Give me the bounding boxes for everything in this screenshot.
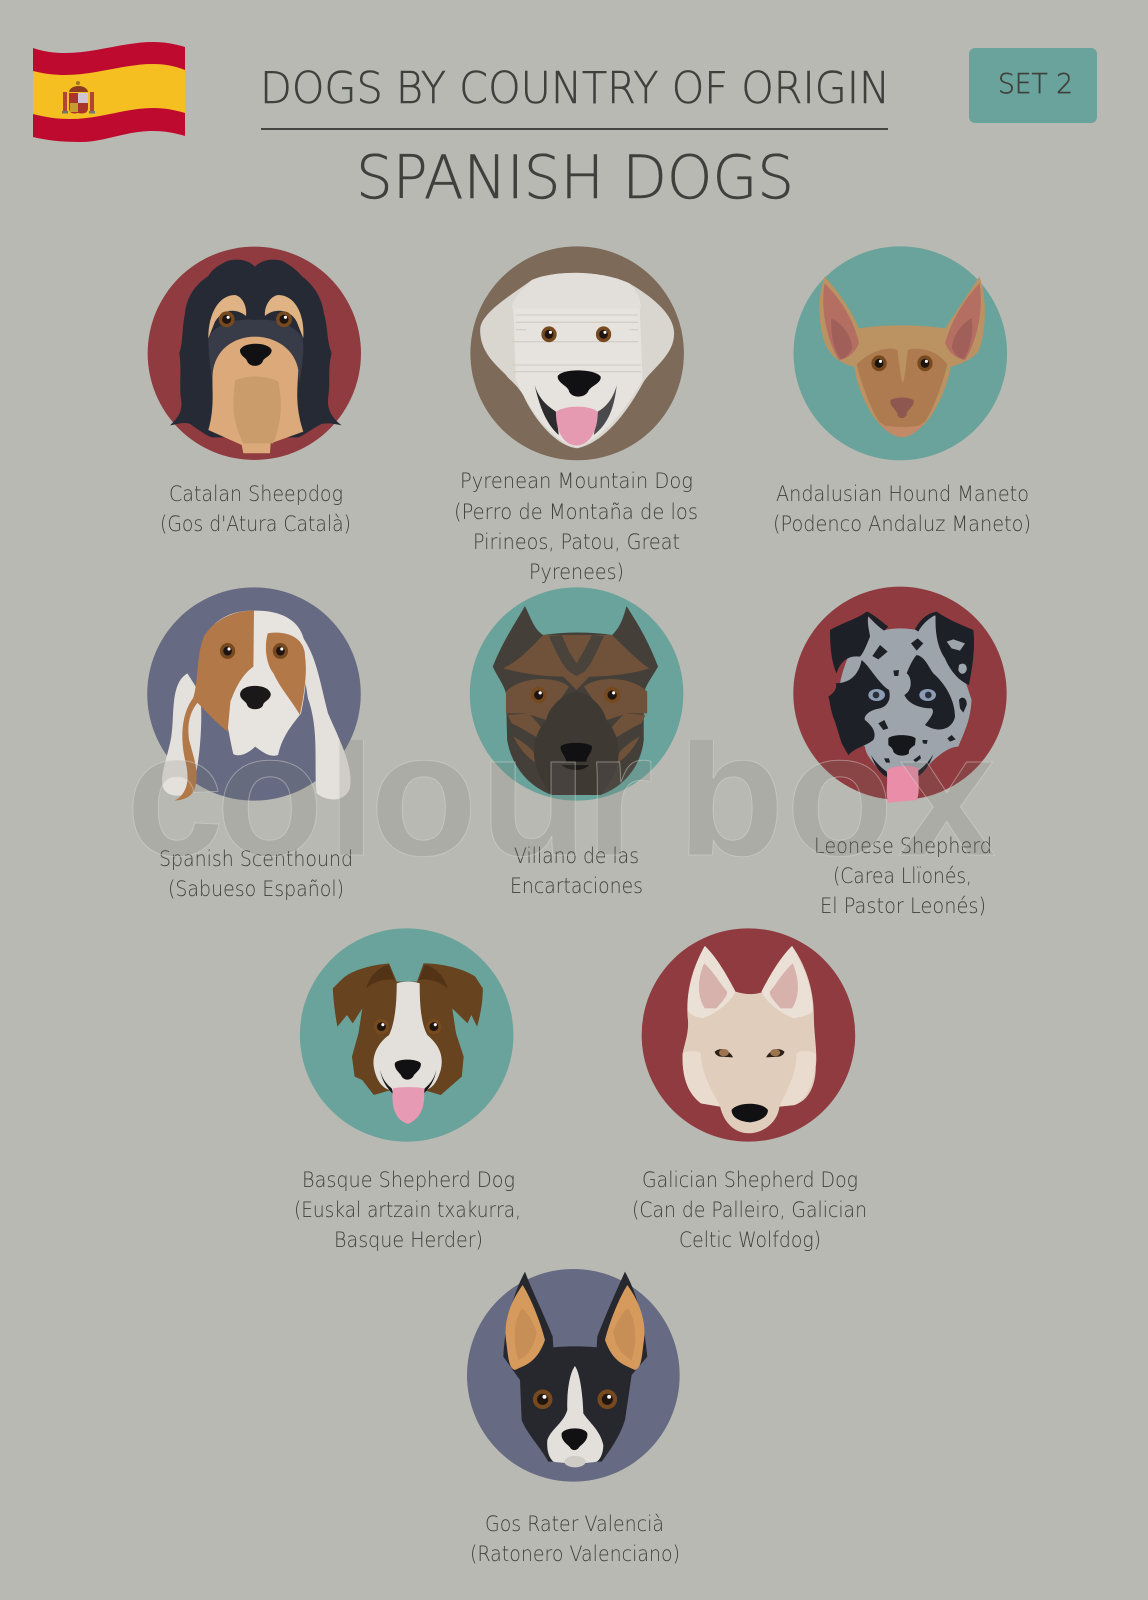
label: Galician Shepherd Dog: (Can de Palleiro, Galician [632,1198,867,1222]
label: Leonese Shepherd [814,834,992,918]
set badge: SET 2 [998,67,1073,100]
flag of Spain [33,42,185,142]
label: Andalusian Hound Maneto [773,482,1031,536]
label: Galician Shepherd Dog: Galician Shepherd Dog [642,1168,858,1192]
label: Galician Shepherd Dog: Celtic Wolfdog) [679,1228,821,1252]
portrait: Villano de las Encartaciones [470,587,683,801]
label: Villano de las Encartaciones: Villano de las [514,844,639,868]
label: Pyrenean Mountain Dog: Pyrenees) [529,560,624,584]
label: Pyrenean Mountain Dog: Pyrenean Mountain Dog [460,469,693,493]
portrait: Pyrenean Mountain Dog [470,246,684,460]
label: Pyrenean Mountain Dog: Pirineos, Patou, Great [473,530,680,554]
label: Andalusian Hound Maneto: (Podenco Andaluz Maneto) [773,512,1031,536]
label: Leonese Shepherd: Leonese Shepherd [814,834,992,858]
coat of arms [62,81,95,114]
label: Andalusian Hound Maneto: Andalusian Hound Maneto [776,482,1029,506]
label: Basque Shepherd Dog: Basque Shepherd Dog [302,1168,515,1192]
label: Galician Shepherd Dog [632,1168,867,1252]
eyes [868,689,936,701]
label: Gos Rater Valencià [470,1512,680,1566]
label: Catalan Sheepdog: (Gos d'Atura Català) [160,512,351,536]
label: Leonese Shepherd: El Pastor Leonés) [820,894,986,918]
label: Gos Rater Valencià: Gos Rater Valencià [485,1512,664,1536]
portrait: Leonese Shepherd [793,587,1007,803]
watermark: colourbox [126,697,996,893]
portrait: Gos Rater Valencià [467,1269,680,1482]
portrait: Catalan Sheepdog [148,247,361,460]
label: Leonese Shepherd: (Carea Llïonés, [833,864,972,888]
set badge [969,48,1097,123]
label: Pyrenean Mountain Dog: (Perro de Montaña de los [454,500,698,524]
portrait: Andalusian Hound Maneto [794,246,1007,460]
title: DOGS BY COUNTRY OF ORIGIN [260,63,890,114]
label: Basque Shepherd Dog: (Euskal artzain txakurra, [294,1198,521,1222]
label: Basque Shepherd Dog: Basque Herder) [334,1228,483,1252]
label: Catalan Sheepdog: Catalan Sheepdog [169,482,343,506]
label: Villano de las Encartaciones [510,844,643,898]
label: Spanish Scenthound: (Sabueso Español) [168,877,344,901]
label: Basque Shepherd Dog [294,1168,521,1252]
label: Pyrenean Mountain Dog [454,469,698,584]
portrait: Galician Shepherd Dog [642,928,855,1142]
portrait: Basque Shepherd Dog [300,928,513,1142]
label: Spanish Scenthound [159,847,353,901]
label: Gos Rater Valencià: (Ratonero Valenciano) [470,1542,680,1566]
label: Spanish Scenthound: Spanish Scenthound [159,847,353,871]
subtitle: SPANISH DOGS [356,143,794,213]
label: Catalan Sheepdog [160,482,351,536]
portrait: Spanish Scenthound [147,587,361,801]
label: Villano de las Encartaciones: Encartaciones [510,874,643,898]
